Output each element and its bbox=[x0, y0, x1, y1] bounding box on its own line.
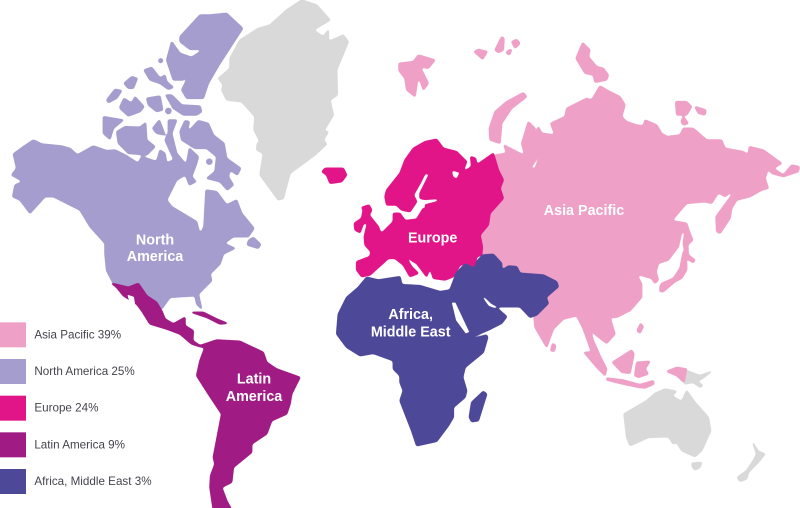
legend bbox=[0, 322, 152, 494]
legend item: North America: North America 25% bbox=[34, 365, 135, 378]
island: Borneo bbox=[612, 350, 634, 373]
region: Asia Pacific bbox=[399, 37, 799, 388]
legend item: Europe bbox=[0, 396, 98, 421]
islands: Arctic archipelago bbox=[103, 59, 241, 190]
island: Sulawesi bbox=[635, 361, 650, 377]
island: Iceland bbox=[322, 168, 347, 183]
island: Novaya Zemlya bbox=[489, 93, 527, 143]
label: Africa, Middle East: Africa, bbox=[388, 307, 433, 323]
label: Africa, Middle East bbox=[371, 307, 451, 340]
region: Africa and Middle East bbox=[337, 254, 558, 446]
Gulf of California bbox=[128, 296, 136, 314]
label: North America: America bbox=[127, 249, 184, 265]
island: Sri Lanka bbox=[551, 343, 556, 351]
region: North America bbox=[12, 13, 261, 309]
region: Latin America bbox=[112, 283, 300, 508]
legend item: North America bbox=[0, 359, 135, 384]
island: Madagascar bbox=[469, 391, 487, 422]
label: North America: North bbox=[136, 232, 174, 248]
island: Nova Scotia bbox=[247, 237, 261, 248]
islands: New Siberian bbox=[676, 102, 706, 125]
island: Cuba bbox=[192, 312, 227, 324]
label: Latin America: America bbox=[226, 389, 283, 405]
island: Ellesmere bbox=[167, 13, 243, 98]
region: Europe bbox=[322, 139, 503, 280]
label: Latin America: Latin bbox=[237, 371, 271, 387]
legend item: Latin America bbox=[0, 432, 125, 457]
legend item: Asia Pacific bbox=[0, 322, 121, 347]
island: Svalbard bbox=[399, 55, 435, 97]
legend item: Latin America: Latin America 9% bbox=[34, 438, 125, 451]
island: Japan bbox=[660, 252, 687, 292]
island: Taiwan bbox=[637, 323, 643, 333]
label: Latin America bbox=[226, 371, 283, 405]
legend item: Asia Pacific: Asia Pacific 39% bbox=[34, 328, 121, 341]
label: Asia Pacific: Asia Pacific bbox=[544, 203, 624, 219]
label: North America bbox=[127, 232, 184, 265]
legend item: Africa, Middle East bbox=[0, 469, 152, 494]
label: Europe: Europe bbox=[408, 230, 457, 246]
islands: Franz Josef Land bbox=[474, 37, 520, 59]
legend item: Europe: Europe 24% bbox=[34, 402, 98, 415]
label: Africa, Middle East: Middle East bbox=[371, 324, 451, 340]
island: Java and Lesser Sunda bbox=[607, 378, 654, 388]
legend item: Africa, Middle East: Africa, Middle East 3% bbox=[34, 475, 152, 488]
region: Greenland and Oceania (grey) bbox=[218, 0, 765, 481]
Red Sea bbox=[453, 303, 468, 333]
island: New Guinea west bbox=[667, 367, 687, 382]
island: Severnaya Zemlya bbox=[576, 43, 608, 82]
